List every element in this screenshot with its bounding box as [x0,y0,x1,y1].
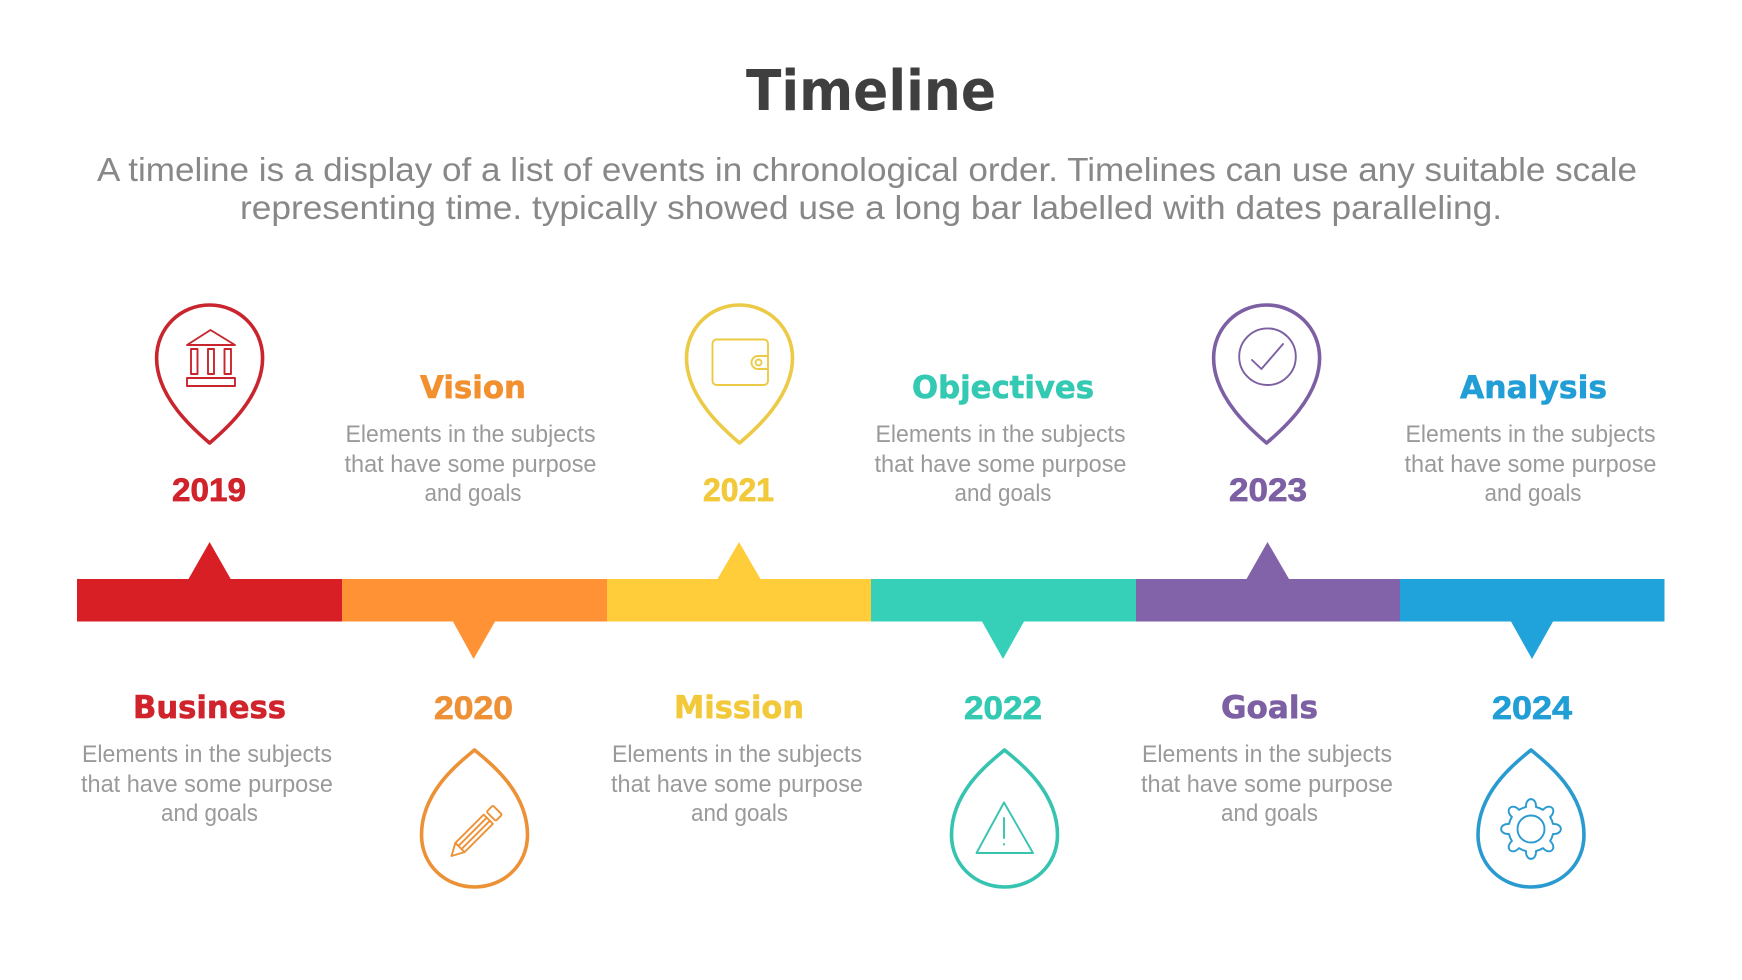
text block: Business [81,690,333,827]
segment: 2022 teal with down marker [871,579,1136,659]
icon: 2022 drop with warning [952,750,1058,887]
text block: Vision [344,370,596,507]
text block: Vision: Elements in the subjects [346,421,596,448]
text block: Analysis: Elements in the subjects [1406,421,1656,448]
text block: Goals [1141,690,1393,827]
text block: Analysis: Analysis [1460,370,1607,406]
subtitle text [97,151,1637,226]
year 2024: 2024 [1492,690,1572,726]
segment: 2020 orange with down marker [342,579,607,659]
text block: Business: and goals [161,800,258,827]
text block: Objectives: that have some purpose [874,451,1126,478]
text block: Mission: that have some purpose [611,771,863,798]
text block: Business: Elements in the subjects [82,741,332,768]
text block: Goals: that have some purpose [1141,771,1393,798]
text block: Business: that have some purpose [81,771,333,798]
icon: 2021 pin with wallet [686,305,792,443]
year 2022: 2022 [964,690,1042,726]
segment: 2021 yellow with up marker [607,542,871,622]
year 2019: 2019 [172,472,246,508]
icon: 2019 pin with bank [157,305,263,443]
text block: Analysis: that have some purpose [1404,451,1656,478]
segment: 2024 blue with down marker [1400,579,1664,659]
text block: Mission: Elements in the subjects [612,741,862,768]
timeline bar [77,542,1664,659]
text block: Vision: that have some purpose [344,451,596,478]
icon: 2020 drop with pencil [422,750,528,887]
segment: 2023 purple with up marker [1136,542,1400,622]
text block: Objectives: Objectives [912,370,1094,406]
text block: Objectives: and goals [954,480,1052,507]
year 2021: 2021 [703,472,774,508]
text block: Goals: Elements in the subjects [1142,741,1392,768]
text block: Analysis [1404,370,1656,507]
text block: Objectives: Elements in the subjects [876,421,1126,448]
segment: 2019 red with up marker [77,542,342,622]
icon: 2023 pin with check [1214,305,1320,443]
text block: Vision: and goals [424,480,522,507]
icon: 2024 drop with gear [1478,750,1584,887]
subtitle text: A timeline is a display of a list of events in chronological order. Timelines can use any suitable scale [97,151,1637,188]
text block: Mission: and goals [691,800,788,827]
year 2020: 2020 [434,690,513,726]
text block: Goals: Goals [1221,690,1318,726]
text block: Mission [611,690,863,827]
text block: Vision: Vision [420,370,526,406]
text block: Goals: and goals [1221,800,1318,827]
text block: Analysis: and goals [1484,480,1582,507]
text block: Business: Business [133,690,286,726]
text block: Mission: Mission [674,690,804,726]
year 2023: 2023 [1229,472,1307,508]
subtitle text: representing time. typically showed use a long bar labelled with dates paralleling. [240,189,1502,226]
title: Timeline [746,59,996,124]
text block: Objectives [874,370,1126,507]
